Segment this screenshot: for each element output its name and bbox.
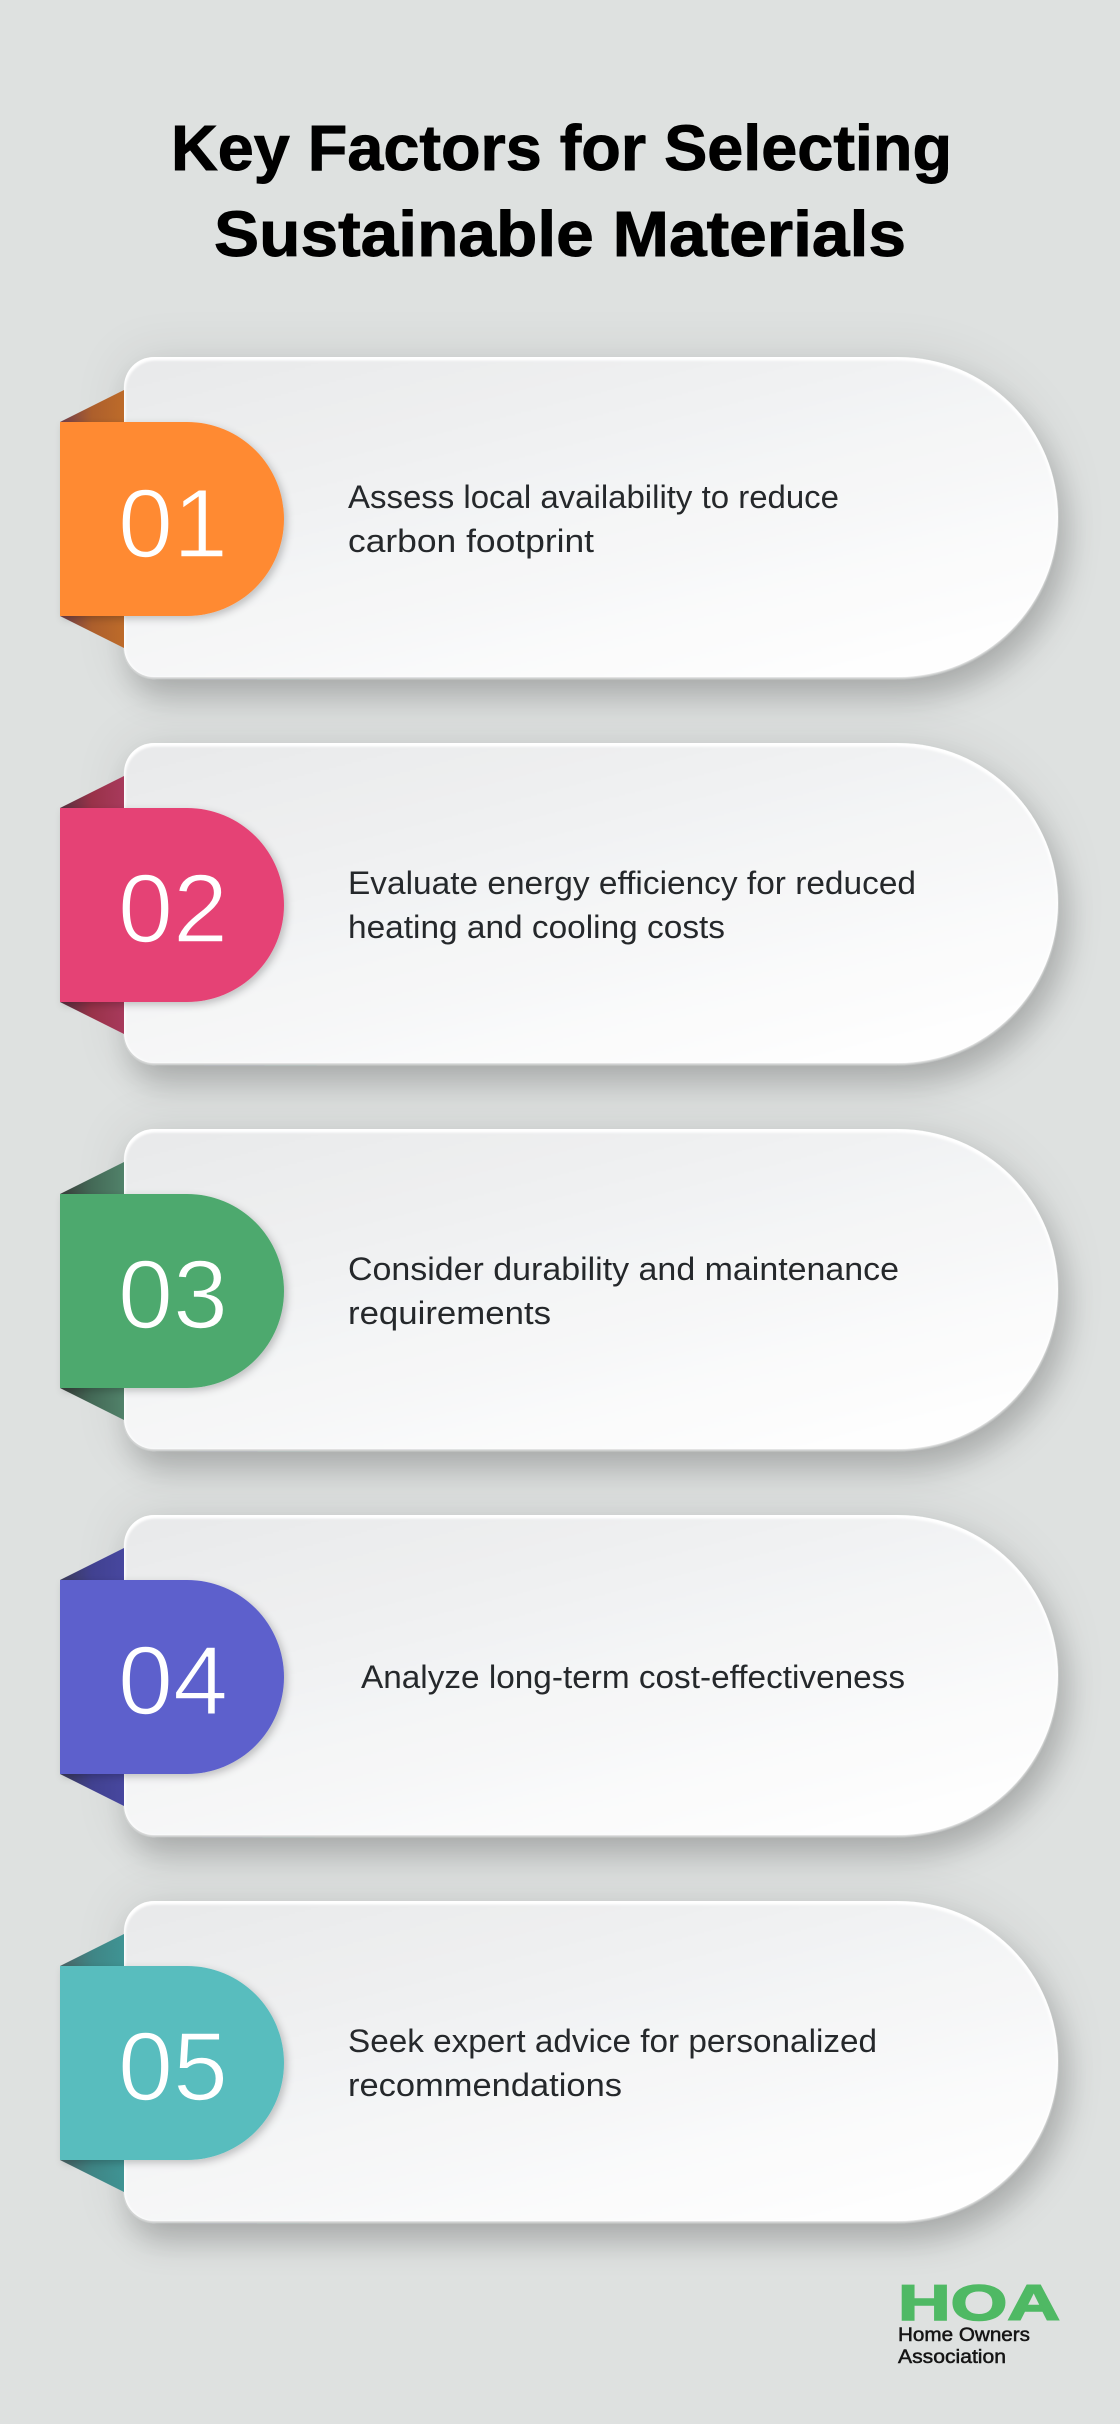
- title: [171, 112, 952, 270]
- text 02: [348, 865, 916, 945]
- ribbon fold 02: [60, 776, 124, 1034]
- logo: HOA Home Owners Association: HOA: [898, 2275, 1060, 2331]
- number 05: 05: [118, 2012, 228, 2121]
- title: Sustainable Materials: [214, 198, 906, 270]
- text 05: [348, 2023, 877, 2103]
- card 04: [124, 1515, 1058, 1836]
- number 04: 04: [118, 1626, 228, 1735]
- card 01: [124, 357, 1058, 678]
- text 03: requirements: [348, 1295, 551, 1331]
- number badge 03: [60, 1194, 284, 1388]
- ribbon fold 03: [60, 1162, 124, 1420]
- ribbon fold 04: [60, 1548, 124, 1806]
- ribbon fold 05: [60, 1934, 124, 2192]
- text 05: recommendations: [348, 2067, 622, 2103]
- panel: factor 02: [60, 743, 1058, 1064]
- text 01: [348, 479, 839, 559]
- text 03: [348, 1251, 899, 1331]
- text 01: carbon footprint: [348, 523, 594, 559]
- number 02: 02: [118, 854, 228, 963]
- logo: HOA Home Owners Association: Association: [898, 2347, 1006, 2368]
- number 01: 01: [118, 469, 228, 578]
- text 03: Consider durability and maintenance: [348, 1251, 899, 1287]
- text 01: Assess local availability to reduce: [348, 479, 839, 515]
- number badge 02: [60, 808, 284, 1002]
- card 05: [124, 1901, 1058, 2222]
- card 02: [124, 743, 1058, 1064]
- number badge 04: [60, 1580, 284, 1774]
- text 02: heating and cooling costs: [348, 909, 725, 945]
- number badge 01: [60, 422, 284, 616]
- panel: factor 04: [60, 1515, 1058, 1836]
- number 03: 03: [118, 1240, 228, 1349]
- panel: factor 05: [60, 1901, 1058, 2222]
- panel: factor 01: [60, 357, 1058, 678]
- panel: factor 03: [60, 1129, 1058, 1450]
- ribbon fold 01: [60, 390, 124, 648]
- title: Key Factors for Selecting: [171, 112, 952, 184]
- card 03: [124, 1129, 1058, 1450]
- text 05: Seek expert advice for personalized: [348, 2023, 877, 2059]
- logo: HOA Home Owners Association: Home Owners: [898, 2325, 1030, 2346]
- number badge 05: [60, 1966, 284, 2160]
- logo: HOA Home Owners Association: [898, 2275, 1060, 2368]
- text 02: Evaluate energy efficiency for reduced: [348, 865, 916, 901]
- text 04: Analyze long-term cost-effectiveness: [361, 1659, 905, 1695]
